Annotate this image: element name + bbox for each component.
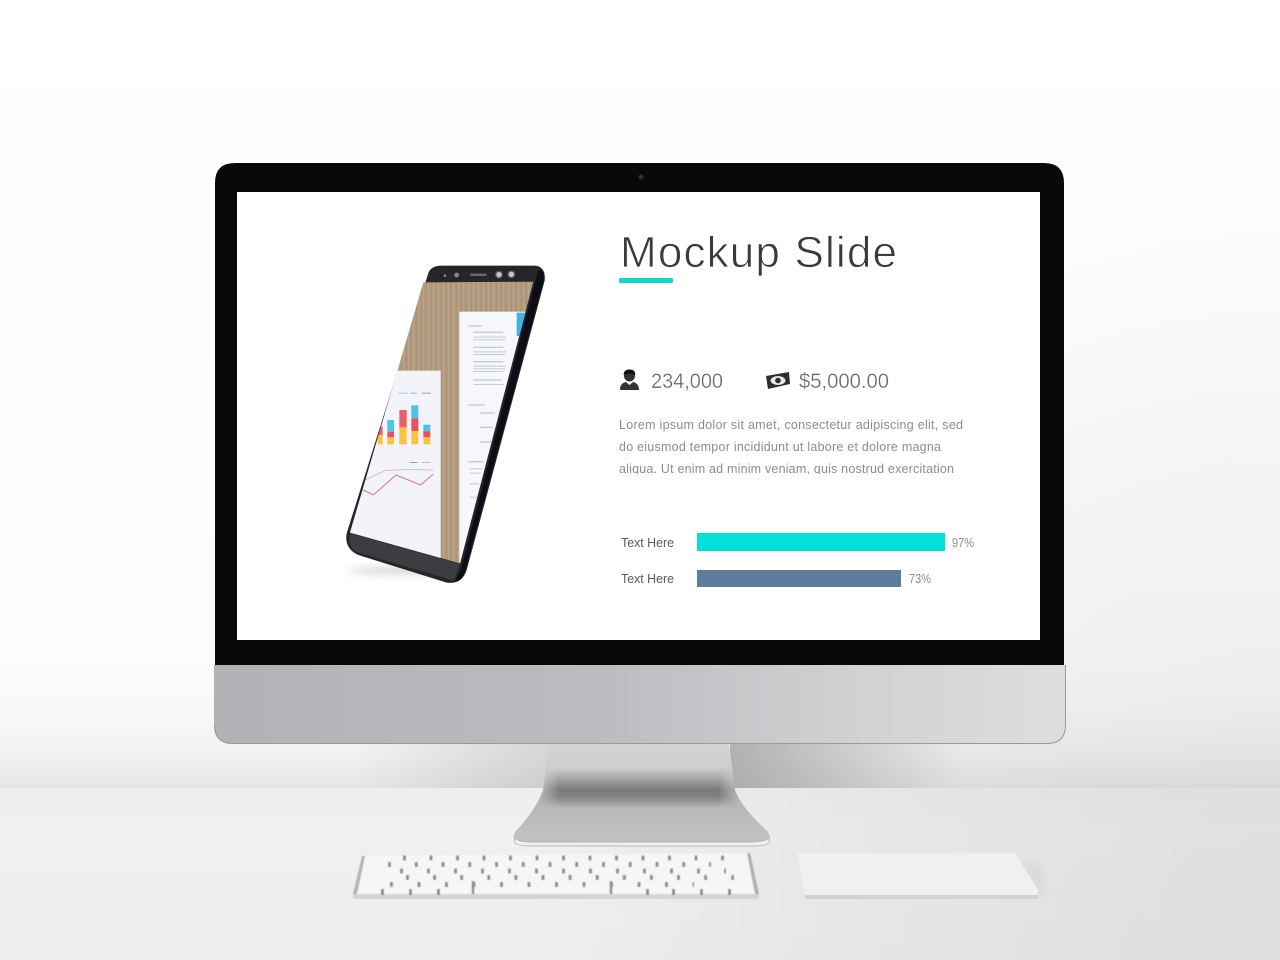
- monitor bezel: [215, 163, 1064, 665]
- body paragraph: do eiusmod tempor incididunt ut labore et dolore magna: [619, 440, 941, 454]
- row label: Text Here: [621, 571, 674, 586]
- monitor chin: [214, 665, 1066, 744]
- body paragraph: aliqua. Ut enim ad minim veniam, quis nostrud exercitation: [619, 462, 954, 476]
- slide screen: [237, 192, 1040, 640]
- row label: Text Here: [621, 535, 674, 550]
- key gaps: [381, 858, 734, 894]
- slide: phone mockup: [330, 266, 546, 583]
- progress bar: [697, 570, 901, 587]
- percent value: 97%: [952, 535, 974, 550]
- trackpad: [797, 853, 1046, 899]
- phone top sensors: [444, 271, 515, 278]
- stacked bar chart: [378, 393, 431, 444]
- stat: money: [766, 370, 889, 393]
- left paper with charts: [350, 370, 441, 558]
- right paper document: [459, 312, 526, 564]
- webcam: [638, 174, 644, 180]
- percent value: 73%: [909, 571, 931, 586]
- body paragraph: [619, 418, 963, 476]
- icon: person: [620, 369, 639, 390]
- monitor: [214, 163, 1066, 846]
- progress bar: [697, 533, 945, 551]
- slide title: Mockup Slide: [620, 228, 897, 277]
- phone screen photo: [350, 282, 534, 564]
- wood desk: [350, 282, 534, 564]
- icon: banknote: [766, 372, 790, 389]
- keyboard: [353, 853, 759, 899]
- progress row 2: [621, 570, 931, 587]
- phone body: [346, 266, 545, 583]
- stat value: $5,000.00: [799, 370, 889, 393]
- monitor stand: [505, 743, 775, 846]
- phone chin highlight: [349, 533, 460, 581]
- stat: people count: [620, 369, 723, 393]
- keyboard body: [353, 853, 759, 899]
- phone shadow: [347, 567, 460, 575]
- trackpad shadow: [1022, 862, 1046, 897]
- line chart: [363, 462, 433, 495]
- stat value: 234,000: [651, 370, 723, 393]
- body paragraph: Lorem ipsum dolor sit amet, consectetur adipiscing elit, sed: [619, 418, 963, 432]
- title underline: [619, 278, 673, 283]
- progress row 1: [621, 533, 974, 551]
